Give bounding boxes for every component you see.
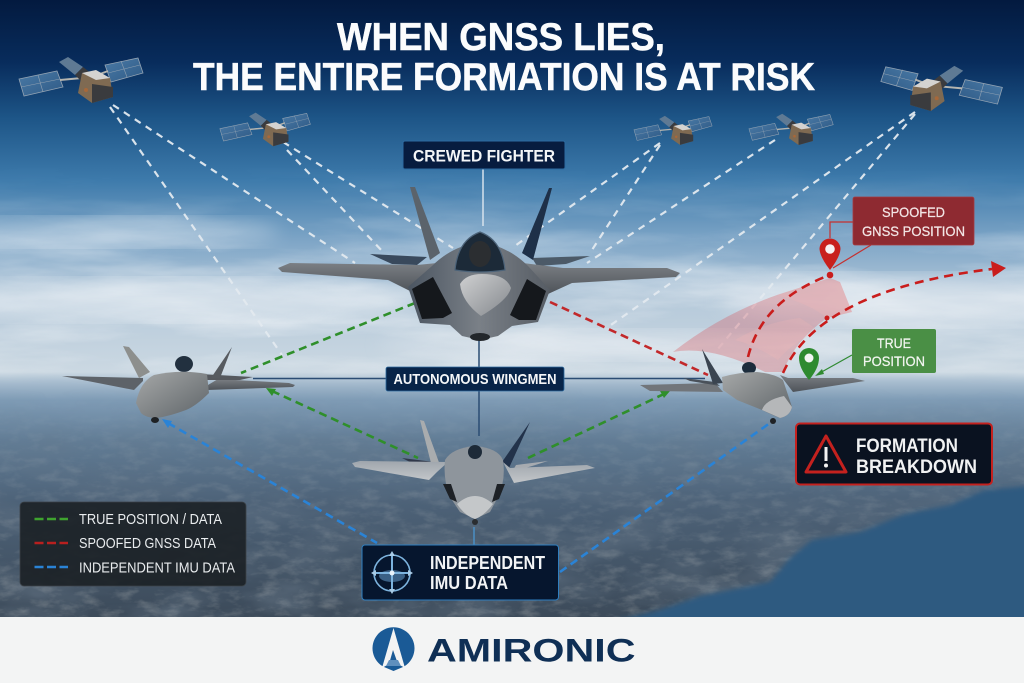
title: WHEN GNSS LIES, (337, 16, 665, 59)
independent IMU links (blue) (162, 419, 770, 572)
callout: spoofed GNSS position (830, 197, 974, 268)
logo: Amironic: AMIRONIC (427, 632, 636, 668)
icon: satellite top right (881, 66, 1002, 111)
legend row: spoofed GNSS: SPOOFED GNSS DATA (79, 536, 216, 552)
title (193, 16, 815, 99)
satellite signal lines (110, 105, 915, 355)
icon: warning triangle (806, 436, 846, 472)
callout: true position: TRUE (877, 335, 911, 351)
icon: satellite 2 (220, 113, 310, 146)
left wingman (62, 346, 295, 423)
logo: Amironic (372, 627, 636, 671)
callout: spoofed GNSS position: SPOOFED (882, 204, 945, 220)
label: crewed fighter: CREWED FIGHTER (413, 146, 555, 166)
callout: formation breakdown: FORMATION (856, 436, 958, 457)
spoofed link (red) (550, 302, 708, 375)
label: independent IMU data: INDEPENDENT (430, 552, 546, 573)
callout: spoofed GNSS position: GNSS POSITION (862, 223, 965, 239)
leader lines for fighter and wingmen labels (253, 169, 705, 545)
icon: satellite 4 (749, 114, 833, 145)
callout: true position (815, 329, 936, 376)
title: THE ENTIRE FORMATION IS AT RISK (193, 56, 815, 99)
icon: green true position pin (799, 348, 819, 380)
label: independent IMU data: IMU DATA (430, 572, 508, 593)
label: autonomous wingmen (386, 367, 564, 391)
spoof deviation fan (673, 278, 852, 372)
callout: true position: POSITION (863, 353, 925, 369)
right wingman (640, 349, 865, 424)
legend (20, 502, 246, 586)
bottom wingman (352, 420, 595, 525)
label: crewed fighter (403, 141, 565, 169)
legend row: true position: TRUE POSITION / DATA (79, 512, 222, 528)
callout: formation breakdown (796, 424, 992, 484)
label: independent IMU data (362, 545, 558, 600)
legend row: independent IMU: INDEPENDENT IMU DATA (79, 560, 235, 576)
icon: IMU gyroscope (371, 551, 413, 594)
main jet: crewed fighter (278, 187, 680, 341)
callout: formation breakdown: BREAKDOWN (856, 457, 977, 478)
icon: satellite top left (19, 57, 143, 103)
spoofed trajectory arrows (748, 261, 1006, 373)
icon: satellite 3 (634, 116, 712, 145)
true data links (green) (241, 303, 670, 458)
icon: red spoofed position pin (820, 239, 840, 270)
icon: Amironic mark (372, 627, 414, 671)
label: autonomous wingmen: AUTONOMOUS WINGMEN (394, 371, 556, 388)
